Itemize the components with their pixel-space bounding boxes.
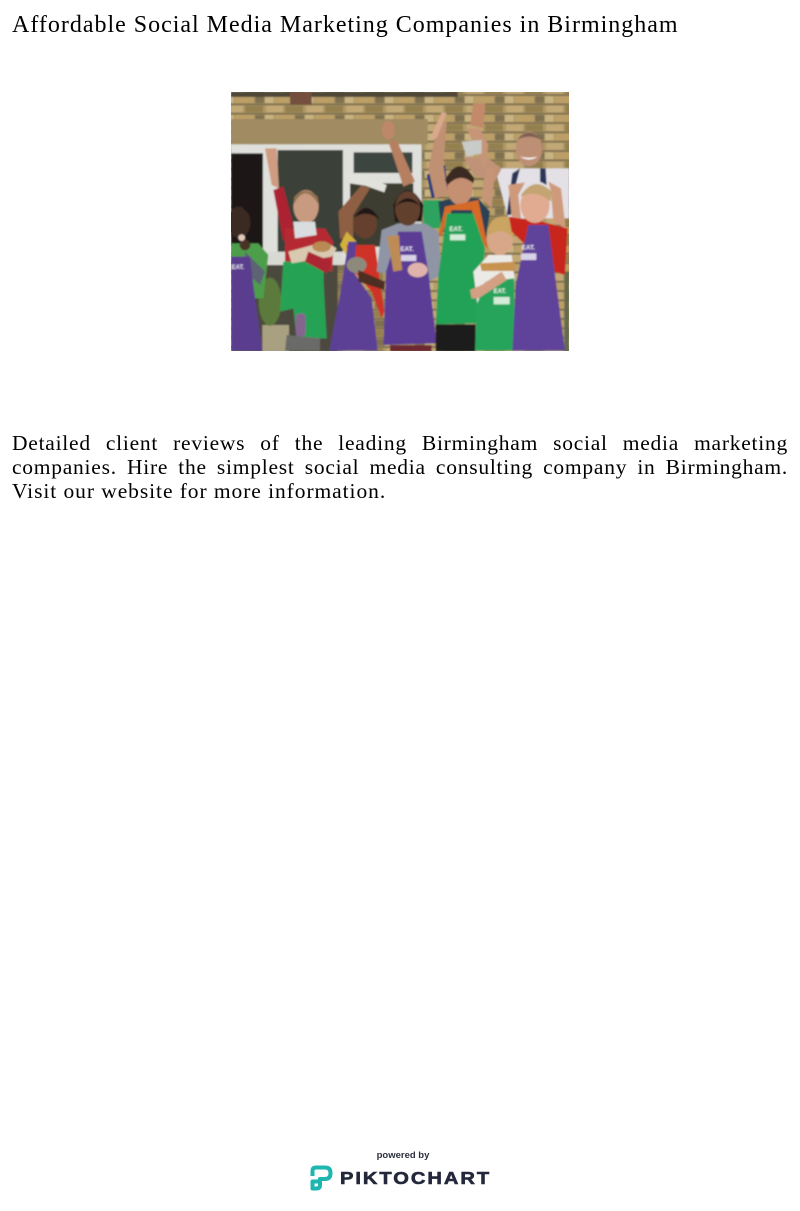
child: far left in purple apron <box>228 205 268 351</box>
photo: children in aprons holding bread <box>231 92 569 351</box>
child: girl in purple apron centre <box>377 190 442 352</box>
child: small boy in green apron <box>470 216 515 351</box>
brick wall <box>225 85 575 355</box>
description paragraph: Visit our website for more information. <box>12 479 386 503</box>
child: tall boy in green apron: EAT. <box>449 226 463 233</box>
child: far left in purple apron: EAT. <box>232 265 245 271</box>
ground and plant <box>231 265 569 352</box>
child: boy in purple apron right: EAT. <box>522 245 535 252</box>
child: small boy in green apron: EAT. <box>494 289 507 295</box>
wordmark: PIKTOCHART <box>340 1168 491 1188</box>
description paragraph: Detailed client reviews of the leading Birmingham social media marketing <box>12 431 788 455</box>
icon: Piktochart P mark <box>310 1166 332 1190</box>
child: girl in green apron <box>265 148 337 351</box>
powered by text: powered by <box>377 1150 429 1161</box>
child: back child arm <box>382 121 448 228</box>
child: tall boy in green apron <box>428 112 495 352</box>
title: Affordable Social Media Marketing Companies in Birmingham <box>12 12 679 38</box>
child: girl in purple apron centre: EAT. <box>400 246 414 253</box>
child: boy in purple apron right <box>508 182 568 351</box>
lintel <box>231 119 428 144</box>
man in back <box>463 103 569 218</box>
description paragraph: companies. Hire the simplest social media consulting company in Birmingham. <box>12 455 788 479</box>
description paragraph <box>12 431 788 503</box>
window frame <box>231 144 422 265</box>
child: girl in purple apron with foil <box>329 173 387 351</box>
powered by Piktochart logo <box>310 1150 491 1190</box>
